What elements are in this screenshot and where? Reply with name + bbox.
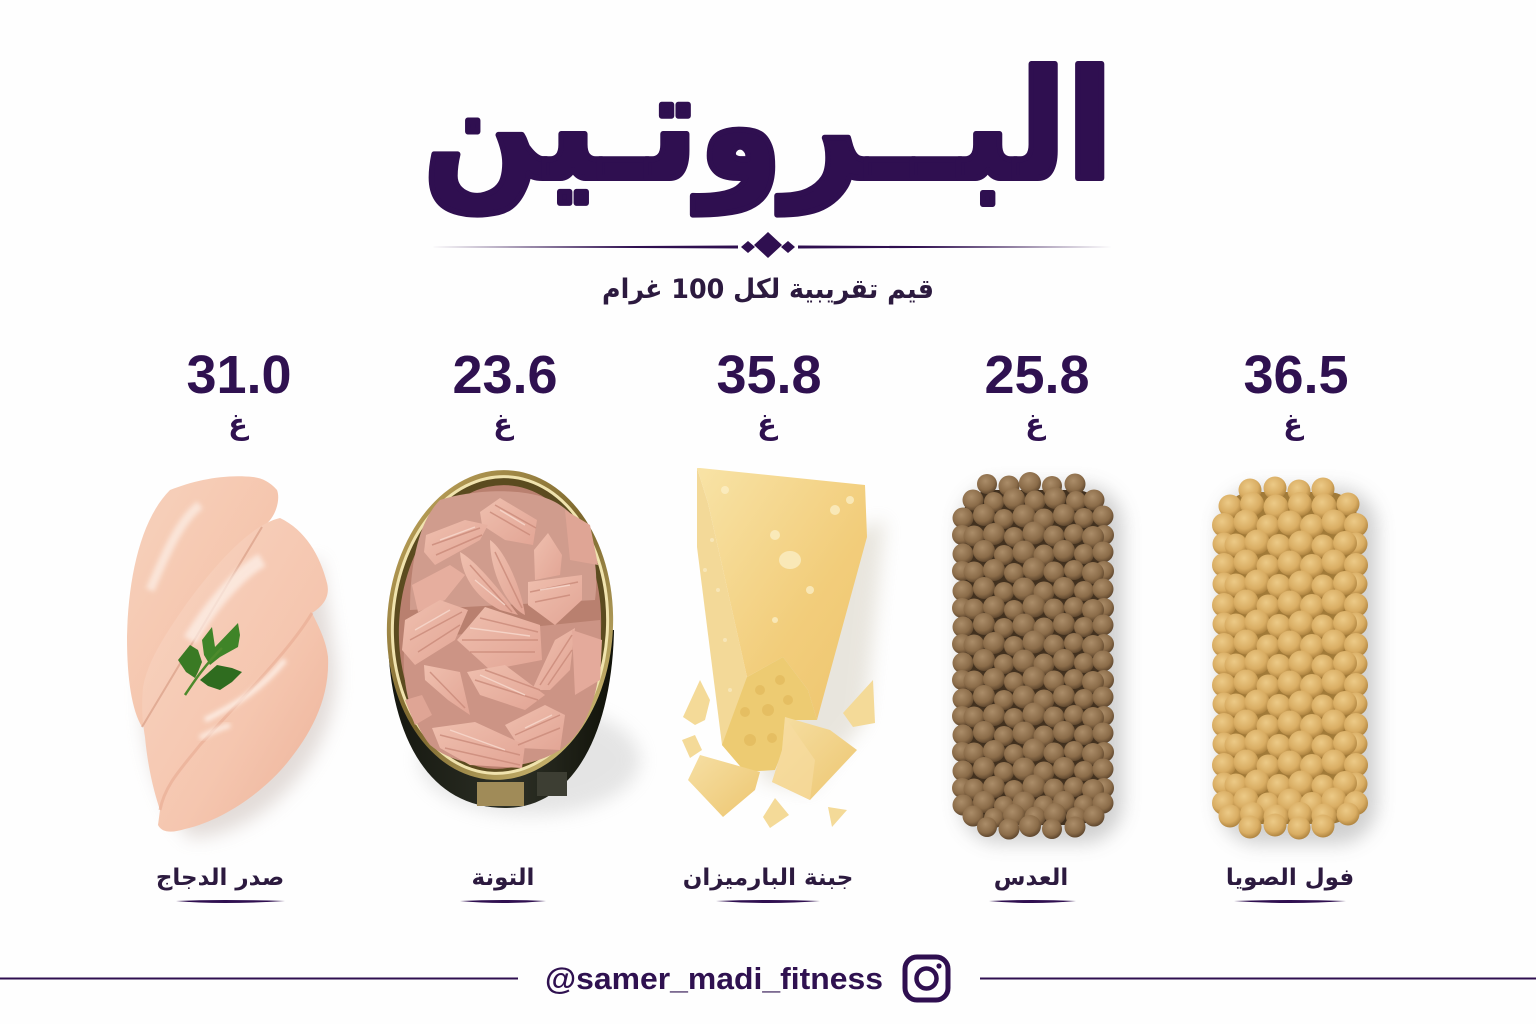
footer handle: @samer_madi_fitness [545,961,883,996]
subtitle: قيم تقريبية لكل 100 غرام [602,274,934,305]
value: chicken breast [186,345,292,441]
footer handle [0,957,1536,1000]
label: soybeans [1226,865,1354,903]
icon: instagram [905,957,948,1000]
value: parmesan [716,345,822,441]
value: lentils: 25.8 [984,345,1090,405]
food: chicken breast [127,476,336,838]
title ornament divider [430,232,1112,258]
value: parmesan: غ [757,407,778,441]
food: lentils [952,472,1123,843]
title: البــروتـين [423,40,1113,215]
cheese crumbles [682,680,875,828]
tuna chunks [402,491,602,768]
food: soybeans [1212,476,1377,844]
value: tuna: 23.6 [452,345,558,405]
value: parmesan: 35.8 [716,345,822,405]
food: parmesan cheese [682,468,885,828]
value: chicken breast: غ [228,407,249,441]
value: lentils [984,345,1090,441]
food: canned tuna [379,464,640,815]
value: lentils: غ [1025,407,1046,441]
label: tuna: التونة [472,865,534,891]
label: chicken breast [156,865,285,903]
label: tuna [460,865,546,903]
value: soybeans: غ [1283,407,1304,441]
value: tuna: غ [493,407,514,441]
value: soybeans: 36.5 [1243,345,1349,405]
label: lentils [989,865,1076,903]
label: parmesan [683,865,853,903]
label: parmesan: جبنة البارميزان [683,865,853,891]
icon: parsley leaf [178,623,242,695]
label: chicken breast: صدر الدجاج [156,865,284,891]
label: lentils: العدس [994,865,1068,891]
value: tuna [452,345,558,441]
value: chicken breast: 31.0 [186,345,292,405]
value: soybeans [1243,345,1349,441]
label: soybeans: فول الصويا [1226,865,1354,891]
